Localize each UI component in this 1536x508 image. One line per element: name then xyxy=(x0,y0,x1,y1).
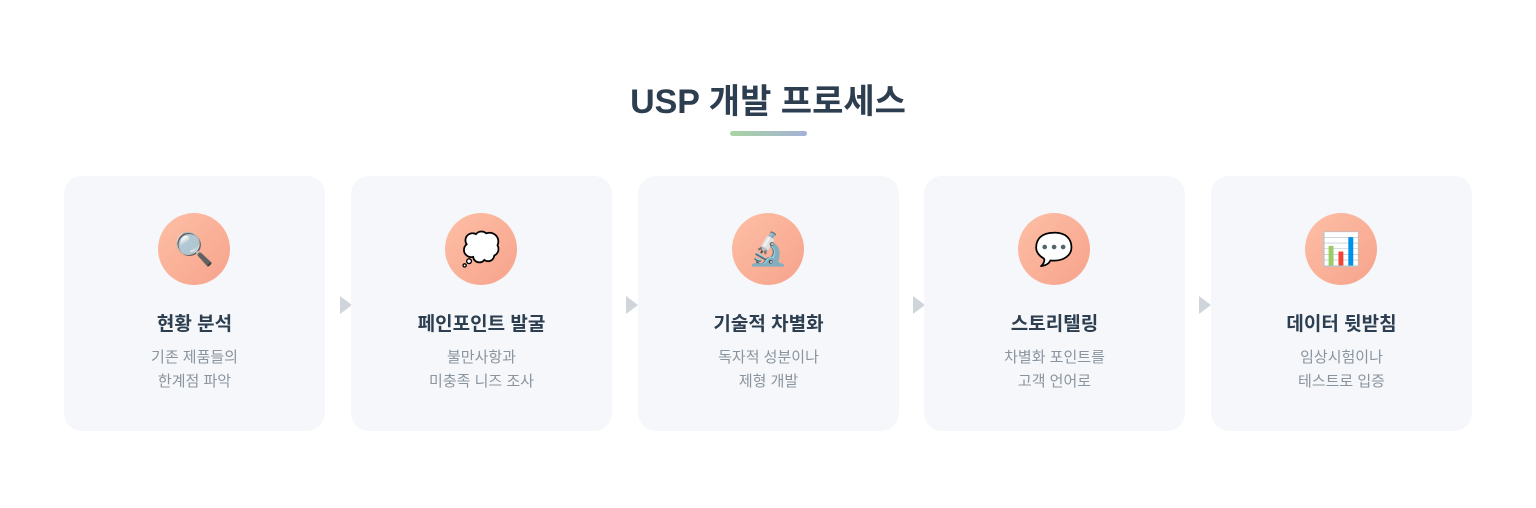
icon: thought bubble: 💭 xyxy=(461,231,501,267)
heading: 현황 분석 xyxy=(157,314,232,335)
icon: speech bubble: 💬 xyxy=(1034,231,1074,267)
icon: magnifier: 🔍 xyxy=(174,231,214,267)
heading: 페인포인트 발굴 xyxy=(418,314,545,335)
title underline xyxy=(730,131,807,136)
text: 차별화 포인트를 xyxy=(1004,349,1105,366)
text: 고객 언어로 xyxy=(1018,373,1091,390)
panel: step 2 xyxy=(351,176,612,431)
icon: thought bubble xyxy=(445,213,517,285)
text xyxy=(1004,349,1105,390)
icon: chart: 📊 xyxy=(1321,231,1361,267)
panel: step 3 xyxy=(638,176,899,431)
text xyxy=(1298,349,1385,390)
arrow xyxy=(626,296,638,314)
icon: chart xyxy=(1305,213,1377,285)
text: 임상시험이나 xyxy=(1300,349,1383,366)
heading: 스토리텔링 xyxy=(1011,314,1098,335)
icon: magnifier xyxy=(158,213,230,285)
title: USP 개발 프로세스 xyxy=(630,83,906,121)
text: 불만사항과 xyxy=(447,349,516,366)
text xyxy=(429,349,534,390)
panel: step 5 xyxy=(1211,176,1472,431)
icon: speech bubble xyxy=(1018,213,1090,285)
text: 기존 제품들의 xyxy=(151,349,238,366)
arrow xyxy=(1199,296,1211,314)
panel: step 1 xyxy=(64,176,325,431)
text xyxy=(718,349,819,390)
text: 독자적 성분이나 xyxy=(718,349,819,366)
text: 미충족 니즈 조사 xyxy=(429,373,534,390)
icon: microscope: 🔬 xyxy=(748,231,788,267)
arrow xyxy=(340,296,352,314)
text: 테스트로 입증 xyxy=(1298,373,1385,390)
text xyxy=(151,349,238,390)
arrow xyxy=(913,296,925,314)
panel: step 4 xyxy=(924,176,1185,431)
text: 제형 개발 xyxy=(739,373,798,390)
icon: microscope xyxy=(732,213,804,285)
text: 한계점 파악 xyxy=(158,373,231,390)
heading: 데이터 뒷받침 xyxy=(1286,314,1397,335)
heading: 기술적 차별화 xyxy=(713,314,824,335)
